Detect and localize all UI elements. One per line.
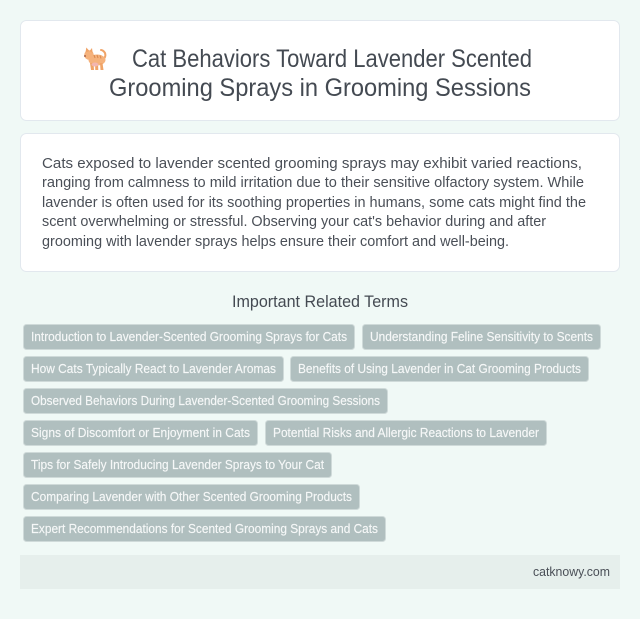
panel: related term tags xyxy=(24,324,600,542)
tag: Understanding Feline Sensitivity to Scents xyxy=(370,329,593,344)
tag xyxy=(266,420,546,446)
tag xyxy=(24,388,388,414)
title: Cat Behaviors Toward Lavender Scented xyxy=(132,45,532,73)
tag: Tips for Safely Introducing Lavender Sprays to Your Cat xyxy=(31,457,324,472)
tag xyxy=(24,324,354,350)
footer xyxy=(20,555,620,589)
text block: description: Cats exposed to lavender scented grooming sprays may exhibit varied reactions, xyxy=(42,155,582,172)
icon: cat xyxy=(84,48,106,70)
panel: title card xyxy=(20,20,620,120)
tag xyxy=(24,484,360,510)
tag: Benefits of Using Lavender in Cat Grooming Products xyxy=(298,361,581,376)
tag: Expert Recommendations for Scented Grooming Sprays and Cats xyxy=(31,521,378,536)
tag: How Cats Typically React to Lavender Aromas xyxy=(31,361,276,376)
tag: Introduction to Lavender-Scented Grooming Sprays for Cats xyxy=(31,329,347,344)
text block: description: lavender is often used for its soothing properties in humans, some cats might find the xyxy=(42,194,586,211)
tag: Observed Behaviors During Lavender-Scented Grooming Sessions xyxy=(31,393,380,408)
text block: description: grooming with lavender sprays helps ensure their comfort and well-being. xyxy=(42,233,509,250)
title: Grooming Sprays in Grooming Sessions xyxy=(109,74,531,102)
text block: description: scent overwhelming or stressful. Observing your cat's behavior during and after xyxy=(42,213,546,230)
tag: Comparing Lavender with Other Scented Grooming Products xyxy=(31,489,352,504)
tag xyxy=(362,324,600,350)
text block: description xyxy=(42,155,586,250)
footer source text: catknowy.com xyxy=(533,564,610,579)
text block: description: ranging from calmness to mild irritation due to their sensitive olfactory system. While xyxy=(42,174,584,191)
panel: description xyxy=(20,134,620,272)
tag xyxy=(24,420,258,446)
title xyxy=(109,45,532,102)
tag xyxy=(290,356,588,382)
tag xyxy=(24,516,386,542)
tag xyxy=(24,356,284,382)
tag: Potential Risks and Allergic Reactions to Lavender xyxy=(273,425,540,440)
heading: related terms: Important Related Terms xyxy=(232,292,408,311)
tag: Signs of Discomfort or Enjoyment in Cats xyxy=(31,425,250,440)
tag xyxy=(24,452,332,478)
